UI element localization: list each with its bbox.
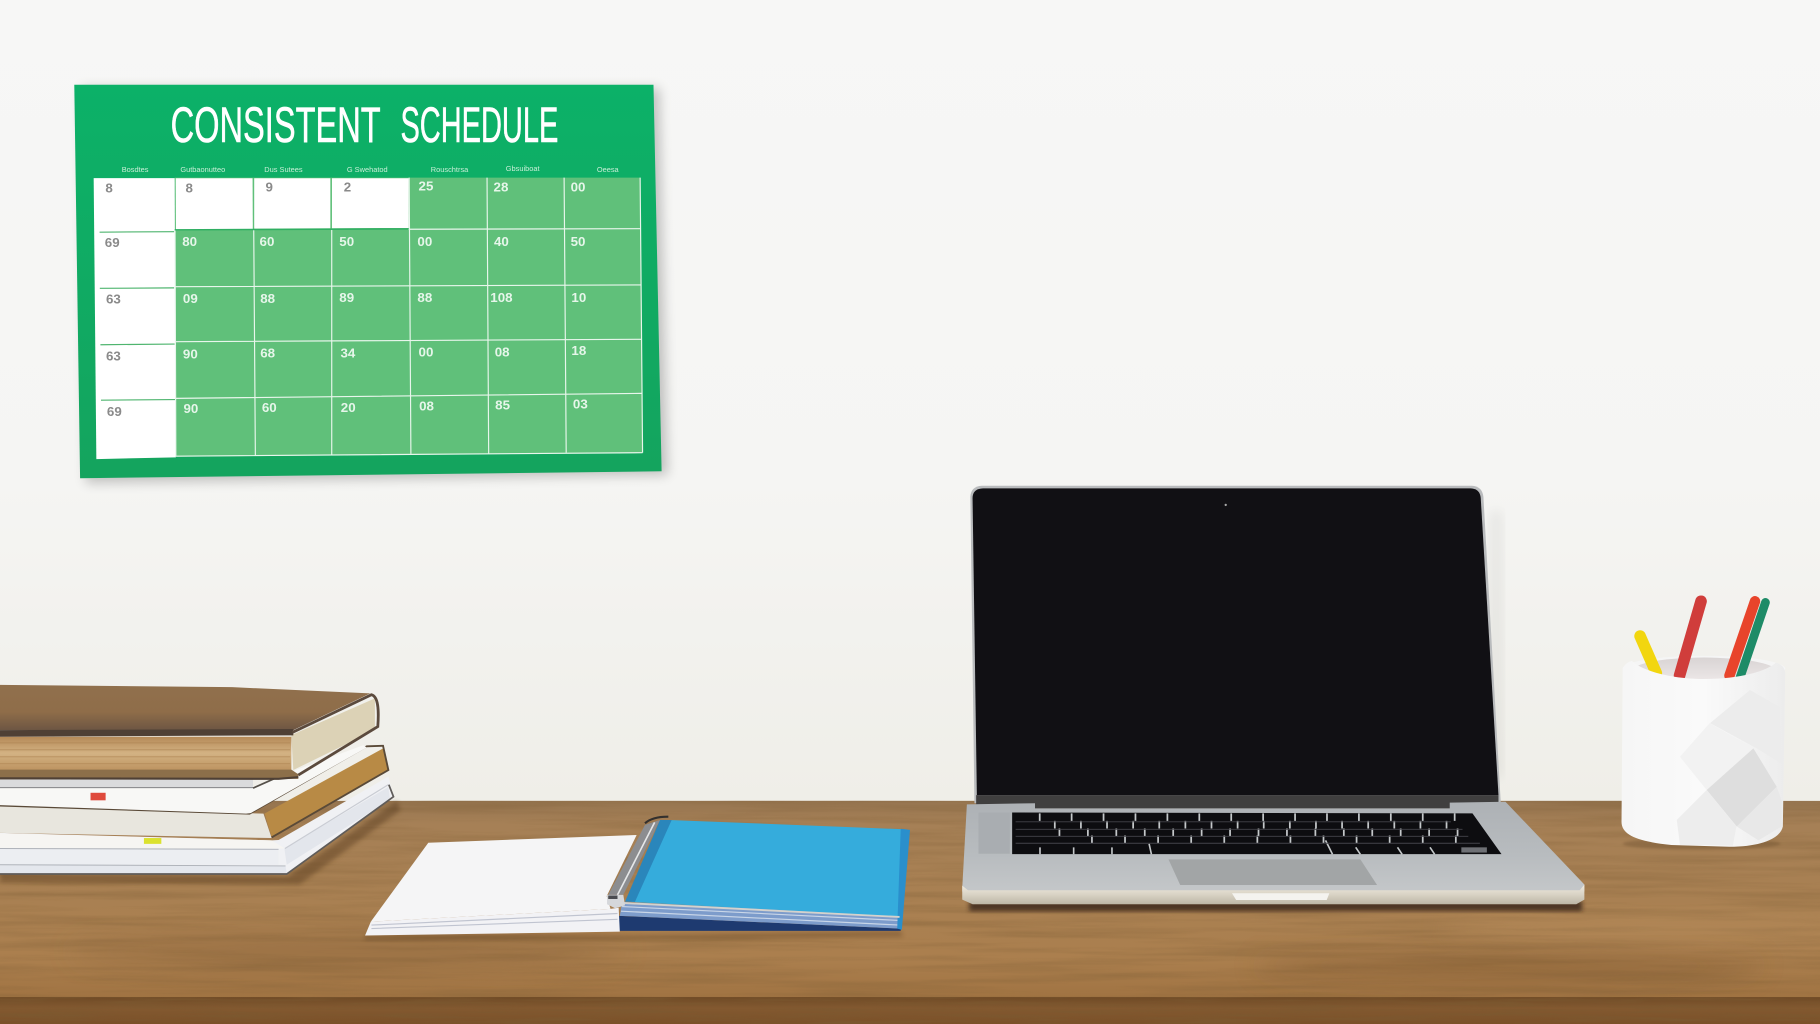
calendar day numbers: 20 (341, 400, 356, 415)
laptop base (962, 802, 1584, 904)
calendar day numbers: 08 (419, 398, 434, 413)
top brown book (0, 685, 378, 779)
weekday headers: G Swehatod (347, 165, 388, 174)
pen cup (1622, 601, 1785, 850)
wooden desk (0, 801, 1820, 1024)
weekday headers: Dus Sutees (264, 165, 303, 174)
green pen (1740, 602, 1765, 678)
calendar day numbers: 00 (571, 180, 585, 195)
calendar day numbers: 69 (107, 404, 122, 419)
red sticky tab (91, 793, 106, 800)
laptop screen (970, 486, 1501, 808)
calendar grid (94, 178, 643, 459)
weekday headers: Bosdtes (122, 165, 149, 174)
calendar day numbers: 40 (494, 234, 509, 249)
weekday headers (122, 164, 620, 174)
pens (1640, 601, 1765, 678)
calendar day numbers: 08 (495, 344, 510, 359)
front notch (1232, 893, 1329, 900)
calendar day numbers: 50 (571, 234, 585, 249)
speaker grille (978, 813, 1010, 854)
calendar day numbers: 2 (344, 180, 351, 195)
calendar day numbers: 00 (417, 234, 432, 249)
calendar day numbers: 80 (182, 234, 197, 249)
calendar day numbers: 90 (183, 347, 198, 362)
calendar day numbers: 03 (573, 397, 588, 412)
calendar day numbers: 90 (184, 401, 198, 416)
calendar day numbers: 63 (106, 292, 121, 307)
trackpad (1168, 859, 1377, 885)
calendar day numbers: 18 (571, 343, 586, 358)
calendar title: CONSISTENT (171, 97, 381, 153)
yellow sticky tab (144, 838, 161, 844)
cream and gold book (0, 746, 388, 838)
wall calendar: consistent schedule (74, 85, 667, 483)
wall background (0, 0, 1820, 803)
calendar day numbers: 00 (419, 344, 433, 359)
calendar day numbers: 108 (490, 290, 513, 305)
metal binder clip (607, 817, 668, 908)
white book with red tab (0, 745, 367, 814)
calendar board (74, 85, 662, 478)
calendar day numbers: 60 (260, 234, 274, 249)
red pen (1680, 601, 1701, 676)
webcam dot (1225, 504, 1227, 506)
calendar day numbers: 09 (183, 291, 198, 306)
blue notebook cover (624, 820, 910, 930)
calendar day numbers: 88 (417, 290, 432, 305)
yellow pen (1640, 636, 1656, 673)
cup body (1622, 661, 1785, 847)
calendar day numbers: 9 (266, 180, 273, 195)
weekday headers: Gbsuiboat (506, 164, 540, 173)
weekday headers: Oeesa (597, 165, 620, 174)
keyboard (1012, 813, 1502, 854)
bottom white book (0, 777, 393, 874)
cup back rim and interior (1623, 656, 1785, 681)
stack of books (0, 685, 400, 884)
calendar day numbers: 85 (495, 398, 511, 413)
calendar day numbers: 68 (260, 346, 275, 361)
calendar day numbers: 88 (260, 291, 275, 306)
calendar day numbers: 89 (339, 290, 354, 305)
weekday headers: Rouschtrsa (431, 165, 469, 174)
calendar day numbers: 60 (262, 400, 277, 415)
weekday headers: Gutbaonutteo (180, 165, 225, 174)
calendar day numbers: 10 (571, 290, 586, 305)
calendar day numbers: 34 (340, 346, 356, 361)
calendar title: SCHEDULE (400, 97, 558, 153)
orange pen (1729, 601, 1755, 676)
calendar day numbers: 69 (105, 235, 120, 250)
calendar day numbers (105, 178, 588, 419)
open notebook (364, 817, 910, 940)
notebook white pages (365, 835, 637, 936)
notebook blue cover back block (619, 902, 901, 931)
calendar day numbers: 28 (494, 180, 508, 195)
laptop (962, 486, 1584, 911)
calendar day numbers: 8 (105, 181, 113, 196)
calendar day numbers: 25 (419, 178, 434, 193)
calendar day numbers: 50 (339, 234, 354, 249)
calendar day numbers: 8 (185, 181, 193, 196)
calendar day numbers: 63 (106, 348, 121, 363)
laptop shadow on desk (969, 901, 1582, 911)
